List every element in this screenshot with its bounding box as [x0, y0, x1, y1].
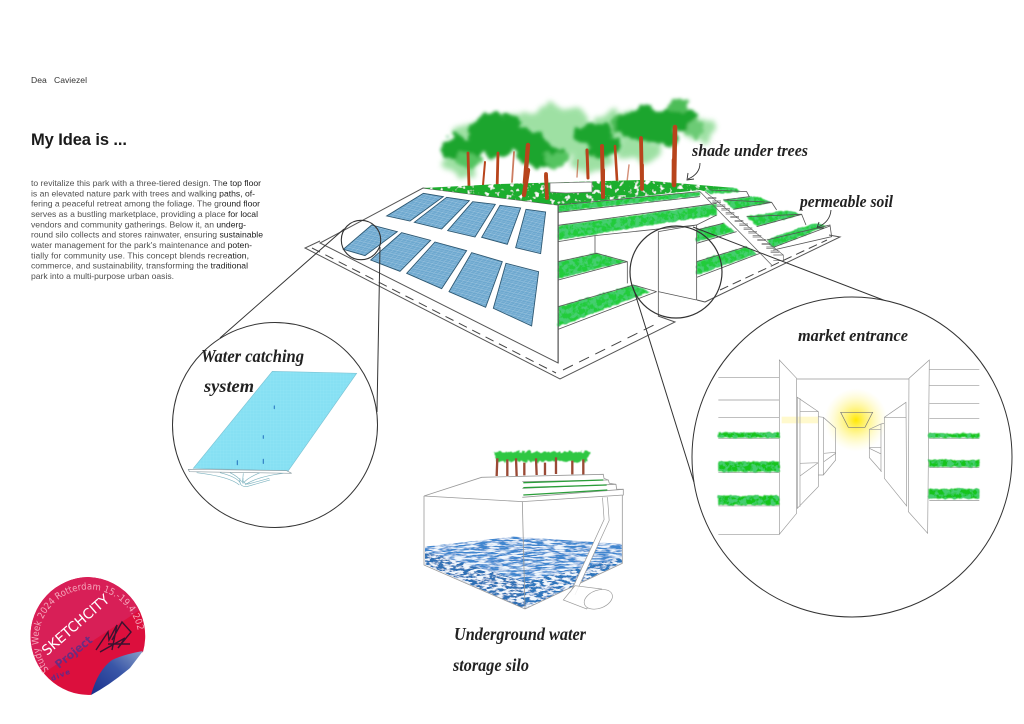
water catching panel — [188, 371, 357, 487]
pump tank — [563, 586, 615, 613]
silo box outline — [424, 474, 623, 609]
scribble — [96, 622, 131, 652]
roof skylight box — [550, 182, 592, 193]
description text block: park into a multi-purpose urban oasis. — [31, 271, 174, 281]
staircase — [700, 192, 783, 265]
road — [305, 235, 840, 379]
connector lines — [633, 227, 925, 492]
right facade terraces — [558, 188, 832, 363]
curved sticker text: Study Week 2024 Rotterdam 15.-19.4.2024 — [32, 582, 144, 673]
terrace outlines — [558, 190, 832, 363]
description text block — [30, 178, 263, 281]
silo roof trees — [493, 452, 590, 476]
label: Water catching — [201, 346, 304, 366]
sticker title: SKETCHCITY — [39, 592, 113, 659]
label: shade under trees: shade under trees — [691, 141, 808, 160]
underground water storage silo — [424, 452, 623, 613]
main building illustration — [30, 96, 1012, 695]
connector lines — [220, 229, 380, 412]
sticker: Sketchcity badge — [30, 577, 146, 695]
label: underground water storage silo — [452, 624, 586, 675]
description text block: fering a peaceful retreat among the foliage. The ground floor — [31, 199, 260, 209]
small magnifier circle on solar panel — [341, 220, 381, 260]
description text block: tially for community use. This concept blends recreation, — [31, 250, 249, 260]
label: shade under trees — [687, 141, 808, 180]
pipe — [573, 497, 607, 594]
green planted terraces — [558, 188, 827, 327]
description text block: water management for the park's maintenance and poten- — [30, 240, 252, 250]
water body — [425, 537, 622, 609]
large detail circle — [692, 297, 1012, 617]
left facade with solar panels — [320, 188, 558, 363]
label line two: system — [203, 376, 254, 396]
description text block: round silo collects and stores rainwater, ensuring sustainable — [31, 230, 263, 240]
dive label: dive — [50, 668, 72, 683]
label line two: storage silo — [452, 655, 529, 675]
detail callout: water catching — [172, 220, 381, 528]
description text block: is an elevated nature park with trees and walking paths, of- — [31, 188, 255, 198]
peeled corner — [91, 651, 143, 695]
small magnifier circle on entrance — [630, 226, 722, 318]
title: My Idea is ... — [31, 131, 127, 149]
trunks in front of the roof — [524, 160, 674, 198]
arrow to the shade — [687, 163, 700, 180]
green planters — [718, 433, 979, 505]
trees on the roof — [440, 98, 718, 198]
sticker face — [29, 577, 147, 695]
description text block: vendors and community gatherings. Below it, an underg- — [31, 219, 246, 229]
label: underground water storage silo: Underground water — [454, 624, 586, 644]
description text block: commerce, and sustainability, transforming the traditional — [31, 261, 248, 271]
solar panels — [343, 193, 546, 326]
glow of the light — [824, 388, 888, 452]
label: permeable soil — [798, 192, 893, 228]
arrow to the soil — [817, 210, 831, 228]
description text block: serves as a bustling marketplace, providing a place for local — [31, 209, 258, 219]
market interior perspective — [718, 360, 979, 534]
green roof — [423, 160, 735, 205]
description text block: to revitalize this park with a three-tiered design. The top floor — [31, 178, 261, 188]
large detail circle — [172, 322, 378, 528]
author name: Dea Caviezel — [31, 75, 87, 85]
terrace planting lines — [523, 480, 607, 495]
project label: Project — [52, 632, 95, 671]
label: permeable soil: permeable soil — [798, 192, 893, 211]
detail callout: market entrance — [630, 226, 1012, 617]
label: market entrance — [798, 326, 908, 345]
